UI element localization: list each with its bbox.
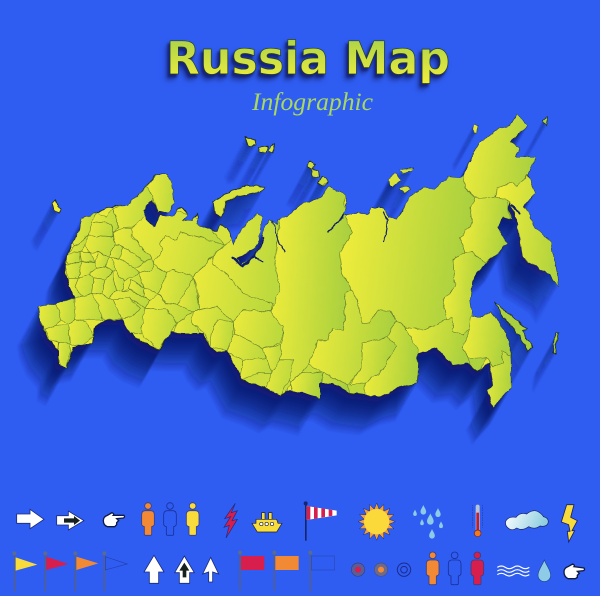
land base [38, 115, 559, 407]
icon: yellow lightning [561, 505, 577, 542]
icon: blue flag [308, 551, 335, 591]
icon: white arrow right [17, 509, 44, 529]
icon: orange person [142, 503, 154, 535]
icon: orange flag [272, 551, 299, 591]
icon: orange target marker [374, 563, 388, 576]
icon: water waves [497, 566, 529, 576]
icon: small arrow up [203, 557, 219, 582]
icon: outlined arrow right [57, 511, 84, 530]
icon: blue target marker [397, 563, 411, 576]
icon: red person [471, 552, 484, 585]
icon: red target marker [351, 563, 365, 576]
icon: red flag [238, 551, 264, 591]
icon: white arrow up [144, 555, 164, 583]
western regions [38, 172, 293, 397]
icon set [12, 501, 585, 591]
icon: thermometer [473, 505, 483, 537]
icon: windsock [304, 501, 337, 541]
icons from the right half [304, 501, 585, 591]
map of Russia [38, 110, 570, 415]
icon: water drop [538, 560, 551, 582]
icons from the left half [12, 503, 299, 591]
icon: orange pennant [73, 551, 98, 591]
icon: blue person [164, 503, 176, 535]
icon: outlined arrow up [175, 556, 194, 583]
icon: sun [358, 503, 395, 540]
icon: rain drops [413, 505, 443, 539]
icon: orange person large [426, 552, 439, 585]
eastern regions [270, 110, 570, 415]
icon: pointing hand [103, 513, 125, 527]
subtitle: Infographic [251, 89, 373, 116]
administrative regions [38, 110, 570, 415]
long map shadow [17, 118, 558, 445]
icon: ship [252, 513, 282, 532]
inland waters [155, 205, 520, 267]
icon: blue pennant [102, 551, 127, 591]
title: Russia Map [166, 32, 450, 85]
icon: blue person large [448, 552, 461, 585]
icon: yellow person [186, 503, 199, 535]
icon: cloud [505, 511, 548, 530]
icon: yellow pennant [12, 551, 37, 591]
icon: red pennant [43, 551, 68, 591]
icon: red lightning [224, 503, 237, 538]
icon: pointing hand right [564, 564, 585, 579]
